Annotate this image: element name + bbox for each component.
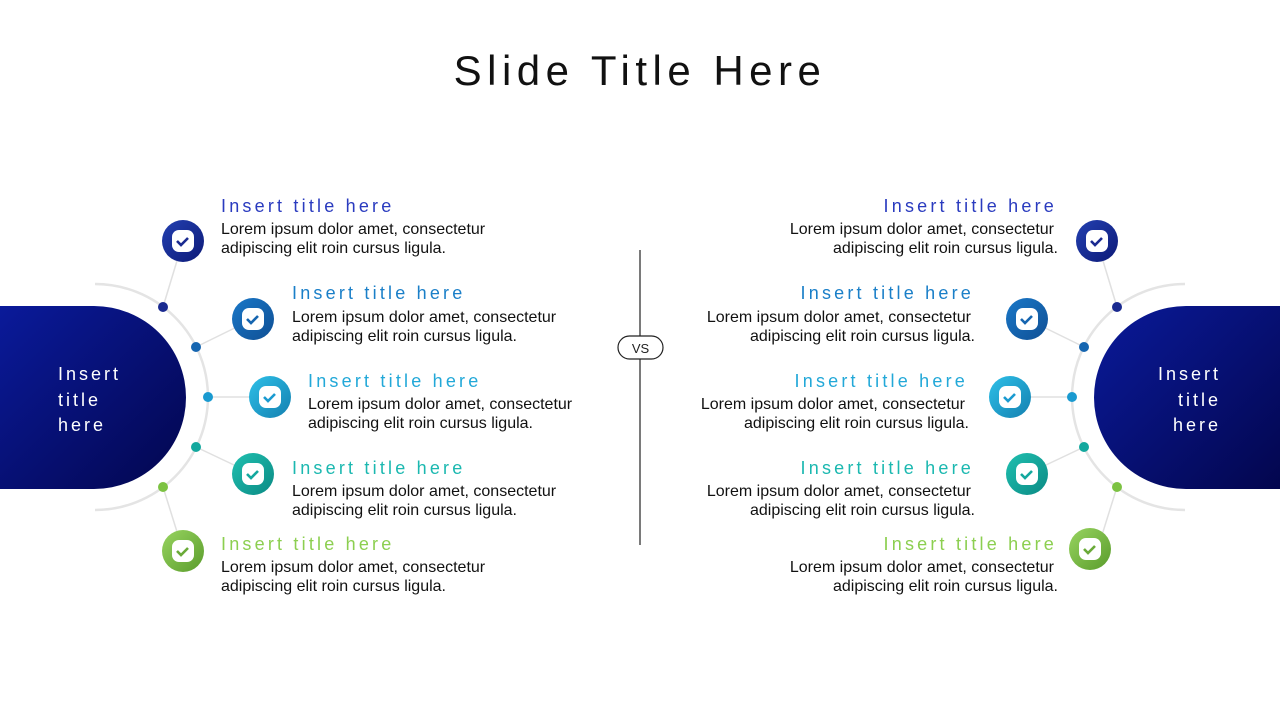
arc right xyxy=(1072,284,1185,510)
text items right: Insert title here xyxy=(795,371,968,391)
text items left: Insert title here xyxy=(221,534,394,554)
text items left: adipiscing elit roin cursus ligula. xyxy=(292,328,517,345)
panel: right xyxy=(701,196,1280,595)
text items right: Lorem ipsum dolor amet, consectetur xyxy=(707,309,972,326)
right main shape xyxy=(1094,306,1280,489)
divider with VS: VS xyxy=(632,341,649,356)
left main shape: here xyxy=(58,415,106,435)
text items left: Insert title here xyxy=(221,196,394,216)
text items right: Lorem ipsum dolor amet, consectetur xyxy=(790,221,1055,238)
text items left: Lorem ipsum dolor amet, consectetur xyxy=(221,559,486,576)
text items left: Lorem ipsum dolor amet, consectetur xyxy=(221,221,486,238)
text items left: Insert title here xyxy=(292,458,465,478)
left main shape xyxy=(0,306,186,489)
text items left: adipiscing elit roin cursus ligula. xyxy=(292,502,517,519)
text items left: adipiscing elit roin cursus ligula. xyxy=(221,240,446,257)
text items right: adipiscing elit roin cursus ligula. xyxy=(750,502,975,519)
icons left xyxy=(162,220,291,572)
text items left: Lorem ipsum dolor amet, consectetur xyxy=(308,396,573,413)
text items right: Insert title here xyxy=(884,196,1057,216)
text items right: Lorem ipsum dolor amet, consectetur xyxy=(707,483,972,500)
text items right: Lorem ipsum dolor amet, consectetur xyxy=(701,396,966,413)
left main shape: title xyxy=(58,390,101,410)
text items right: adipiscing elit roin cursus ligula. xyxy=(750,328,975,345)
text items left: adipiscing elit roin cursus ligula. xyxy=(221,578,446,595)
connectors right xyxy=(1010,241,1117,551)
left main shape: Insert xyxy=(58,364,121,384)
icons right xyxy=(989,220,1118,570)
right main shape: here xyxy=(1173,415,1221,435)
connectors left xyxy=(163,241,270,551)
panel: left xyxy=(0,196,573,595)
text items right: adipiscing elit roin cursus ligula. xyxy=(744,415,969,432)
text items right: Insert title here xyxy=(801,283,974,303)
text items right: Lorem ipsum dolor amet, consectetur xyxy=(790,559,1055,576)
right main shape: title xyxy=(1178,390,1221,410)
text items left: adipiscing elit roin cursus ligula. xyxy=(308,415,533,432)
dots left xyxy=(158,302,213,492)
text items left: Insert title here xyxy=(308,371,481,391)
title: Slide Title Here xyxy=(454,47,826,94)
text items left: Insert title here xyxy=(292,283,465,303)
text items right: Insert title here xyxy=(884,534,1057,554)
text items left xyxy=(221,196,573,595)
arc left xyxy=(95,284,208,510)
text items left: Lorem ipsum dolor amet, consectetur xyxy=(292,483,557,500)
divider with VS xyxy=(618,250,663,545)
right main shape: Insert xyxy=(1158,364,1221,384)
text items right: adipiscing elit roin cursus ligula. xyxy=(833,578,1058,595)
dots right xyxy=(1067,302,1122,492)
text items left: Lorem ipsum dolor amet, consectetur xyxy=(292,309,557,326)
text items right: Insert title here xyxy=(801,458,974,478)
text items right xyxy=(701,196,1058,595)
text items right: adipiscing elit roin cursus ligula. xyxy=(833,240,1058,257)
